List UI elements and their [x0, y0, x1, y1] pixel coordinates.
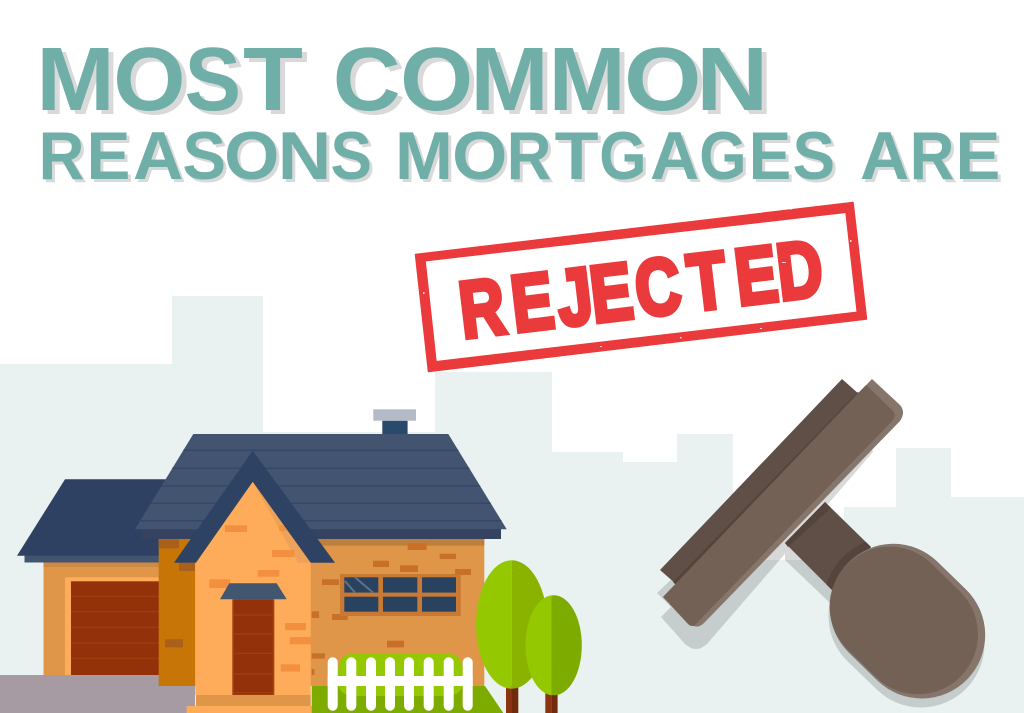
- stamp tool: [657, 379, 922, 649]
- garage door: [65, 577, 160, 675]
- title line 1: N: [696, 30, 768, 130]
- rejected stamp mark: [416, 202, 866, 372]
- wall bricks: [312, 543, 471, 675]
- white picket fence: [328, 657, 473, 711]
- title line 2: E: [749, 118, 791, 194]
- title line 2: A: [860, 118, 909, 194]
- grass: [312, 686, 503, 713]
- title line 2: A: [650, 118, 699, 194]
- title line 2: T: [555, 118, 598, 194]
- large tree: [476, 560, 547, 713]
- title line 2: R: [39, 118, 84, 194]
- title line 2: S: [182, 118, 226, 194]
- title line 2: S: [792, 118, 835, 194]
- title line 2: G: [699, 118, 747, 194]
- chimney: [373, 409, 416, 435]
- title line 2: O: [452, 118, 507, 194]
- front gable: [174, 451, 335, 695]
- front door: [232, 599, 274, 696]
- title line 2: M: [395, 118, 453, 194]
- house: [0, 409, 507, 713]
- title line 2: G: [599, 118, 647, 194]
- title line 1: O: [624, 30, 702, 130]
- title line 2: R: [507, 118, 551, 194]
- garage roof: [17, 479, 175, 562]
- gable wall: [195, 482, 311, 695]
- ground driveway: [0, 675, 195, 713]
- title line 1: O: [113, 30, 186, 130]
- title line 2: E: [87, 118, 130, 194]
- window: [340, 574, 461, 616]
- gable roof: [174, 451, 335, 563]
- title line 2: A: [133, 118, 183, 194]
- stamp border: [416, 202, 866, 372]
- garage: [17, 479, 175, 675]
- gable bricks: [209, 525, 311, 672]
- stamp shadows: [657, 400, 921, 649]
- city skyline background: [0, 296, 1024, 713]
- main wall: [195, 539, 484, 686]
- garage wall: [44, 562, 160, 675]
- title line 1: T: [243, 30, 303, 130]
- stamp handle head: [890, 604, 922, 635]
- title line 2: E: [956, 118, 1000, 194]
- orange column: [159, 539, 196, 686]
- small tree: [525, 595, 582, 713]
- stamp front plate: [663, 379, 903, 627]
- title line 1: M: [549, 30, 626, 130]
- stamp texture specks: [423, 208, 852, 347]
- title line 2: S: [330, 118, 372, 194]
- title line 2: R: [910, 118, 954, 194]
- title line 1: M: [36, 30, 115, 130]
- title line 1: C: [333, 30, 401, 130]
- main roof: [135, 434, 507, 539]
- title: [36, 30, 1000, 194]
- title line 2: O: [224, 118, 279, 194]
- title line 1: O: [400, 30, 473, 130]
- title line 2: N: [278, 118, 331, 194]
- stamp back plate: [660, 379, 860, 584]
- front steps: [187, 695, 320, 713]
- title line 1: S: [185, 30, 241, 130]
- hedge: [338, 653, 463, 696]
- trees: [476, 560, 582, 713]
- title line 1: M: [470, 30, 549, 130]
- door awning: [220, 583, 287, 599]
- stamp word: REJECTED: [455, 224, 827, 356]
- stamp handle neck: [785, 502, 871, 590]
